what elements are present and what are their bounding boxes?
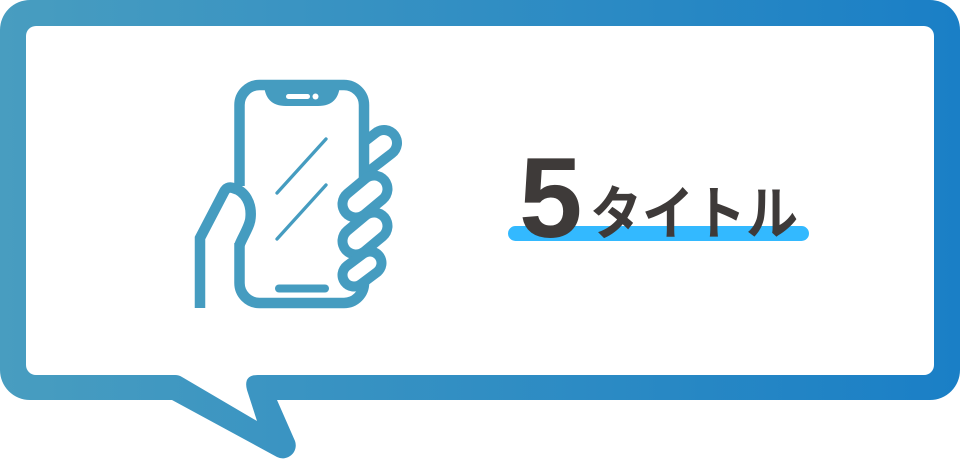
camera dot: [312, 94, 318, 100]
title underline: [508, 226, 809, 241]
arm and thumb: [200, 188, 251, 308]
phone body: [240, 85, 364, 303]
speaker slot: [286, 94, 310, 99]
title text: タイトル: [590, 181, 798, 247]
icon: hand holding smartphone: [200, 84, 384, 308]
screen glare lines: [277, 139, 326, 239]
top finger behind phone: [362, 143, 384, 160]
fingers: [354, 189, 374, 275]
home bar: [275, 284, 329, 292]
phone notch: [264, 84, 340, 106]
title number: 5: [519, 135, 582, 262]
